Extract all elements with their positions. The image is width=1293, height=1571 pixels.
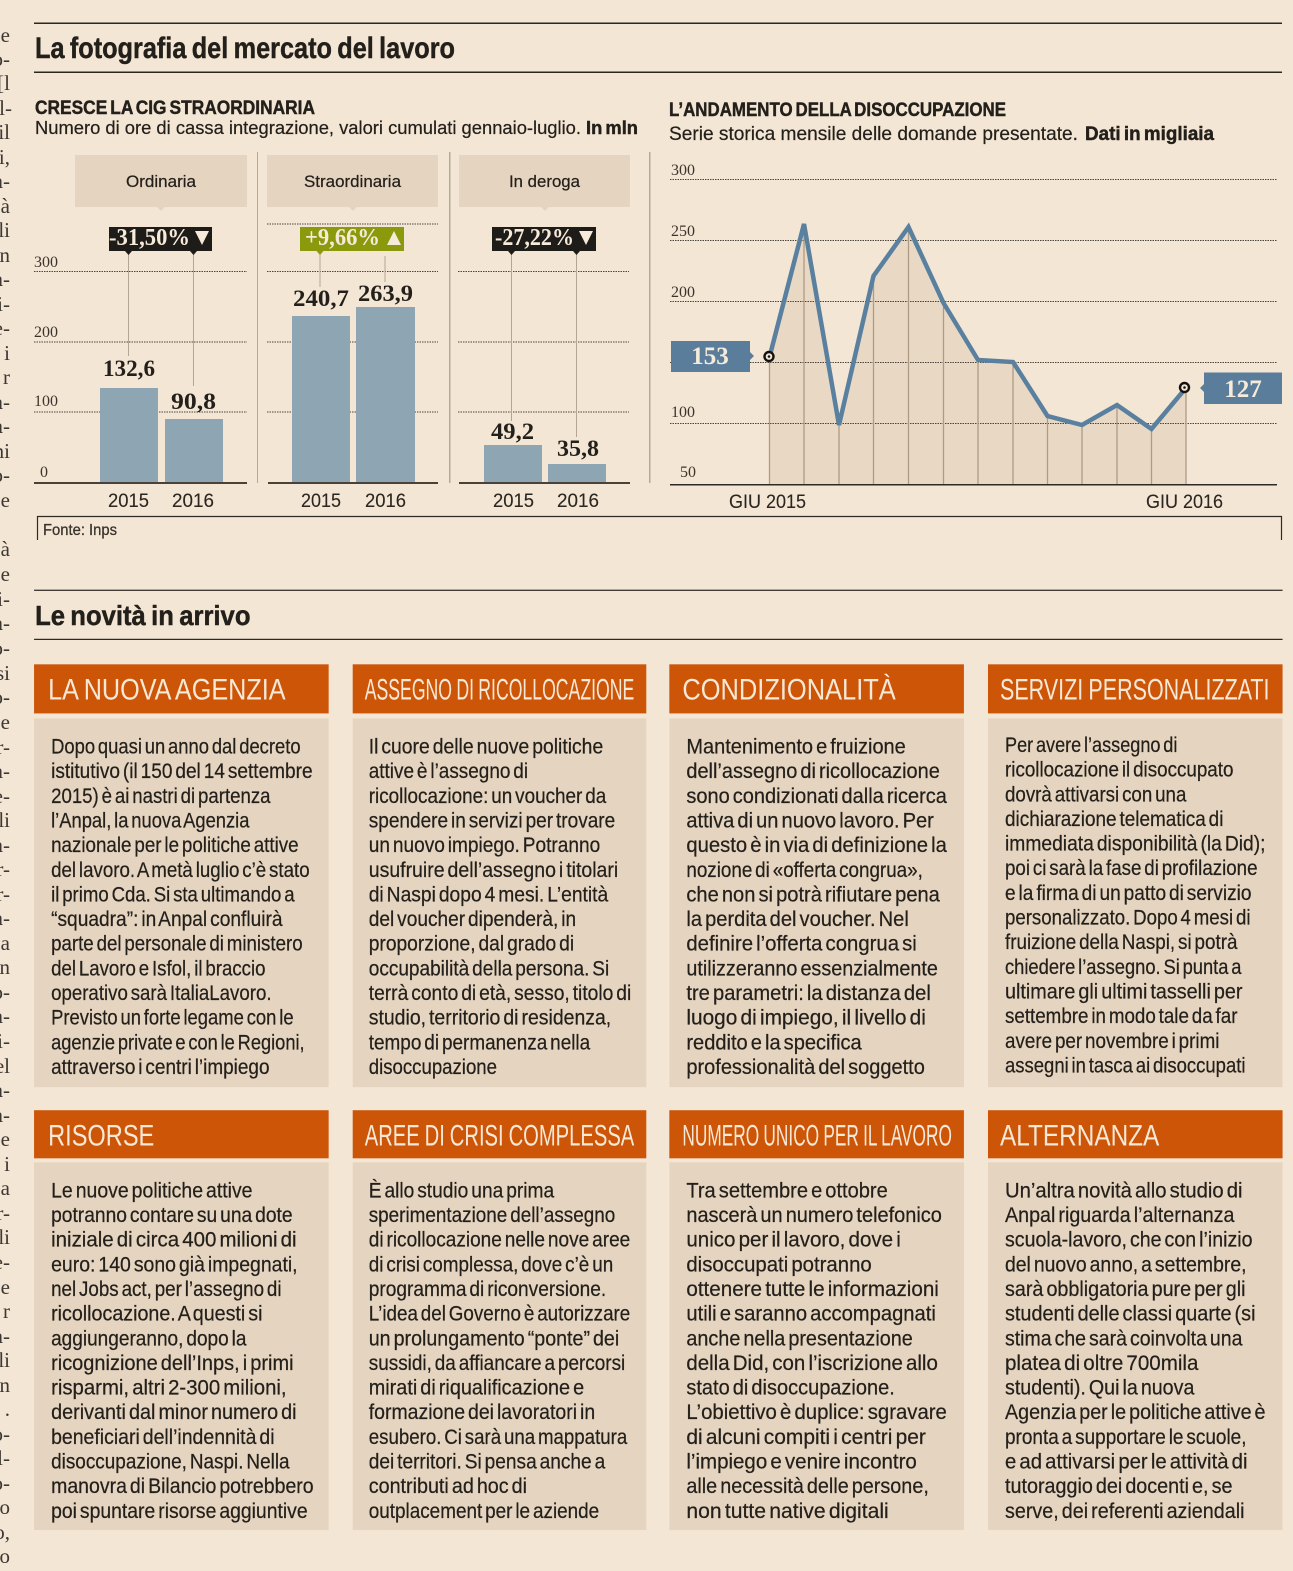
panel: Aree di crisi complessa: un prolungamento “ponte” dei [369,1327,619,1350]
panel: La nuova agenzia: il primo Cda. Si sta ultimando a [51,883,295,906]
y axis labels: 200 [34,324,58,341]
panel: La nuova agenzia: LA NUOVA AGENZIA [48,673,286,706]
adjacent article column text cut at left margin: . [5,1397,10,1421]
panel: Servizi personalizzati: personalizzato. Dopo 4 mesi di [1005,907,1250,930]
panel: Servizi personalizzati: dichiarazione telematica di [1005,808,1223,831]
panel: Numero unico per il lavoro: della Did, con l’iscrizione allo [686,1352,938,1375]
y axis labels: 100 [34,393,58,410]
panel: Assegno di ricollocazione: disoccupazione [369,1056,497,1079]
panel: Risorse [34,1110,329,1530]
panel: La nuova agenzia [34,664,329,1087]
adjacent article column text cut at left margin: e [1,710,10,734]
chart heading: Cresce la Cig straordinaria: CRESCE LA CIG STRAORDINARIA [35,98,315,119]
panel: Servizi personalizzati: e la firma di un patto di servizio [1005,882,1251,905]
panel: Servizi personalizzati: immediata disponibilità (la Did); [1005,833,1266,856]
panel: Straordinaria: 263,9 [358,281,413,306]
panel: Risorse: derivanti dal minor numero di [51,1401,297,1424]
callout: 127: 127 [1224,376,1262,403]
panel: Ordinaria: 90,8 [171,389,216,414]
panel: La nuova agenzia: parte del personale di ministero [51,933,303,956]
adjacent article column text cut at left margin: r [3,1299,10,1323]
panel: In deroga: 2016 [557,491,599,512]
panel: Servizi personalizzati: assegni in tasca ai disoccupati [1005,1054,1245,1077]
panel: Aree di crisi complessa: formazione dei lavoratori in [369,1401,595,1424]
panel: Numero unico per il lavoro: anche nella presentazione [686,1327,913,1350]
panel: Aree di crisi complessa: È allo studio una prima [369,1179,554,1202]
panel: Risorse: beneficiari dell’indennità di [51,1426,275,1449]
adjacent article column text cut at left margin: i [4,1152,10,1176]
callout: 127 [1180,372,1282,404]
panel: Numero unico per il lavoro: Tra settembre e ottobre [686,1179,888,1202]
panel: Numero unico per il lavoro: utili e saranno accompagnati [686,1303,936,1326]
panel: Assegno di ricollocazione: ricollocazione: un voucher da [369,785,606,808]
panel: Alternanza: studenti). Qui la nuova [1005,1377,1195,1400]
adjacent article column text cut at left margin: a [1,931,11,955]
panel: Condizionalità: questo è in via di definizione la [686,834,947,857]
panel: Assegno di ricollocazione: tempo di permanenza nella [369,1031,590,1054]
panel: Numero unico per il lavoro: di alcuni compiti i centri per [686,1426,926,1449]
panel: Assegno di ricollocazione: un nuovo impiego. Potranno [369,834,600,857]
panel: Assegno di ricollocazione: spendere in servizi per trovare [369,809,615,832]
panel: Numero unico per il lavoro: nascerà un numero telefonico [686,1204,942,1227]
panel: Alternanza: Agenzia per le politiche attive è [1005,1401,1266,1424]
panel: Alternanza: e ad attivarsi per le attività di [1005,1451,1247,1474]
axis labels [671,162,696,481]
axis labels: 100 [671,404,695,421]
panel: Risorse: manovra di Bilancio potrebbero [51,1475,314,1498]
panel: Condizionalità: CONDIZIONALITÀ [682,673,896,706]
panel: La nuova agenzia: Previsto un forte legame con le [51,1007,294,1030]
tag: +9,66%: +9,66% [305,225,380,251]
panel: Aree di crisi complessa: L’idea del Governo è autorizzare [369,1303,630,1326]
panel: Alternanza: Un’altra novità allo studio di [1005,1179,1242,1202]
panel: Assegno di ricollocazione: terrà conto di età, sesso, titolo di [369,982,631,1005]
panel: Alternanza: serve, dei referenti aziendali [1005,1500,1244,1523]
panel: Alternanza: Anpal riguarda l’alternanza [1005,1204,1235,1227]
panel: Alternanza: pronta a supportare le scuole, [1005,1426,1246,1449]
panel: In deroga: In deroga [509,173,581,191]
callout: 153: 153 [691,343,729,370]
panel: Assegno di ricollocazione: proporzione, dal grado di [369,933,574,956]
chart heading: L'andamento della disoccupazione: Serie storica mensile delle domande presentate. [669,123,1078,145]
panel: Risorse: poi spuntare risorse aggiuntive [51,1500,308,1523]
panel: Risorse: nel Jobs act, per l’assegno di [51,1278,282,1301]
panel: Servizi personalizzati: dovrà attivarsi con una [1005,783,1187,806]
panel: Condizionalità: nozione di «offerta congrua», [686,859,923,882]
chart heading: Cresce la Cig straordinaria [35,98,638,138]
panel: Risorse: euro: 140 sono già impegnati, [51,1253,298,1276]
data line [770,224,1185,429]
chart heading: Cresce la Cig straordinaria: Numero di ore di cassa integrazione, valori cumulati gennaio-luglio. [35,117,581,138]
panel: Risorse: aggiungeranno, dopo la [51,1327,247,1350]
panel: Assegno di ricollocazione: Il cuore delle nuove politiche [369,736,603,759]
bar chart: cassa integrazione [34,152,650,512]
y axis labels: 0 [40,464,48,481]
panel: In deroga [459,155,630,512]
panel: Alternanza: tutoraggio dei docenti e, se [1005,1475,1232,1498]
panel: La nuova agenzia: attraverso i centri l’impiego [51,1056,270,1079]
panel: Condizionalità [669,664,964,1087]
area under line [770,224,1186,485]
panel: Numero unico per il lavoro: ottenere tutte le informazioni [686,1278,939,1301]
panel: La nuova agenzia: l’Anpal, la nuova Agenzia [51,809,250,832]
month drop lines [770,224,1186,485]
x labels [729,492,1223,513]
y axis labels [34,254,58,481]
panel: Aree di crisi complessa: dei territori. Si pensa anche a [369,1451,605,1474]
panel: Servizi personalizzati [988,664,1283,1087]
adjacent article column text cut at left margin: e [1,488,10,512]
adjacent article column text cut at left margin: i [4,341,10,365]
panel: Alternanza: ALTERNANZA [1000,1119,1159,1152]
panel: Ordinaria: 132,6 [103,356,155,381]
section heading: Le novità in arrivo: Le novità in arrivo [35,600,250,631]
axis labels: 300 [671,162,695,179]
chart heading: Cresce la Cig straordinaria: In mln [586,117,638,138]
panel: Servizi personalizzati: Per avere l’assegno di [1005,734,1177,757]
panel: Aree di crisi complessa: sperimentazione dell’assegno [369,1204,615,1227]
panel: Risorse: risparmi, altri 2-300 milioni, [51,1377,287,1400]
source box: Fonte: Inps [43,522,117,539]
panel: Aree di crisi complessa: programma di riconversione. [369,1278,606,1301]
panel: Assegno di ricollocazione: occupabilità della persona. Si [369,957,609,980]
panel: Straordinaria: 240,7 [293,286,349,311]
section heading: La fotografia del mercato del lavoro: La fotografia del mercato del lavoro [35,32,455,65]
panel: La nuova agenzia: “squadra”: in Anpal confluirà [51,908,283,931]
callout: 153 [671,341,774,372]
panel: La nuova agenzia: Dopo quasi un anno dal decreto [51,736,301,759]
panel: Assegno di ricollocazione: attive è l’assegno di [369,760,528,783]
panel: Condizionalità: Mantenimento e fruizione [686,736,906,759]
panel: Risorse: ricollocazione. A questi si [51,1303,263,1326]
panel: Condizionalità: che non si potrà rifiutare pena [686,883,940,906]
axis labels: 250 [671,223,695,240]
panel: Aree di crisi complessa: sussidi, da affiancare a percorsi [369,1352,625,1375]
panel: Assegno di ricollocazione [353,664,646,1087]
x labels: GIU 2015 [729,492,806,513]
panel: Condizionalità: tre parametri: la distanza del [686,982,931,1005]
panel: Aree di crisi complessa: esubero. Ci sarà una mappatura [369,1426,628,1449]
panel: Alternanza: platea di oltre 700mila [1005,1352,1199,1375]
adjacent article column text cut at left margin: e [1,562,10,586]
panel: Condizionalità: definire l’offerta congrua si [686,933,917,956]
panel: Servizi personalizzati: fruizione della Naspi, si potrà [1005,931,1238,954]
line chart: disoccupazione [670,162,1282,513]
panel: Aree di crisi complessa: outplacement per le aziende [369,1500,599,1523]
panel: Aree di crisi complessa: mirati di riqualificazione e [369,1377,584,1400]
panel: La nuova agenzia: istitutivo (il 150 del 14 settembre [51,760,313,783]
panel: Servizi personalizzati: ultimare gli ultimi tasselli per [1005,980,1242,1003]
panel: Numero unico per il lavoro: non tutte native digitali [686,1500,889,1523]
axis labels: 50 [680,464,696,481]
panel: Numero unico per il lavoro [669,1110,964,1530]
panel: Assegno di ricollocazione: del voucher dipenderà, in [369,908,576,931]
panel: Aree di crisi complessa: di crisi complessa, dove c’è un [369,1253,613,1276]
panel: Alternanza: scuola-lavoro, che con l’inizio [1005,1229,1252,1252]
panel: Servizi personalizzati: ricollocazione il disoccupato [1005,759,1233,782]
panel: Aree di crisi complessa: AREE DI CRISI COMPLESSA [365,1119,634,1152]
panel: La nuova agenzia: 2015) è ai nastri di partenza [51,785,271,808]
panel: Straordinaria: 2015 [301,491,341,512]
panel: In deroga: 35,8 [557,436,599,461]
panel: Numero unico per il lavoro: disoccupati potranno [686,1253,872,1276]
panel: Straordinaria [267,155,438,512]
y axis labels: 300 [34,254,58,271]
panel: Risorse: ricognizione dell’Inps, i primi [51,1352,294,1375]
panel: La nuova agenzia: nazionale per le politiche attive [51,834,299,857]
panel: Condizionalità: la perdita del voucher. Nel [686,908,909,931]
panel: Assegno di ricollocazione: di Naspi dopo 4 mesi. L’entità [369,883,608,906]
panel: Aree di crisi complessa: contributi ad hoc di [369,1475,527,1498]
panel: Risorse: RISORSE [48,1119,154,1152]
panel: Numero unico per il lavoro: NUMERO UNICO PER IL LAVORO [682,1119,952,1152]
adjacent article column text cut at left margin: e [1,1275,10,1299]
panel: Ordinaria: 2016 [172,491,214,512]
panel: In deroga: 49,2 [491,419,534,444]
panel: Ordinaria: Ordinaria [126,173,197,191]
panel: Alternanza [988,1110,1283,1530]
panel: Numero unico per il lavoro: l’impiego e venire incontro [686,1451,917,1474]
panel: Condizionalità: dell’assegno di ricollocazione [686,760,940,783]
tag: -31,50%: -31,50% [109,225,190,251]
panel: Condizionalità: attiva di un nuovo lavoro. Per [686,809,934,832]
panel: Condizionalità: luogo di impiego, il livello di [686,1007,926,1030]
panel: Numero unico per il lavoro: unico per il lavoro, dove i [686,1229,901,1252]
adjacent article column text cut at left margin: à [1,194,11,218]
panel: Servizi personalizzati: poi ci sarà la fase di profilazione [1005,857,1258,880]
tag: +9,66% [300,225,404,255]
panel: Numero unico per il lavoro: alle necessità delle persone, [686,1475,929,1498]
adjacent article column text cut at left margin [0,23,12,1568]
panel: Numero unico per il lavoro: L’obiettivo è duplice: sgravare [686,1401,947,1424]
panel: Assegno di ricollocazione: usufruire dell’assegno i titolari [369,859,618,882]
panel: Aree di crisi complessa [353,1110,646,1530]
panel: La nuova agenzia: del lavoro. A metà luglio c’è stato [51,859,310,882]
panel: La nuova agenzia: agenzie private e con le Regioni, [51,1031,305,1054]
panel: Ordinaria [34,155,247,512]
panel: Risorse: Le nuove politiche attive [51,1179,253,1202]
panel: Condizionalità: sono condizionati dalla ricerca [686,785,947,808]
panel: Condizionalità: utilizzeranno essenzialmente [686,957,938,980]
panel: Condizionalità: professionalità del soggetto [686,1056,925,1079]
panel: Numero unico per il lavoro: stato di disoccupazione. [686,1377,895,1400]
panel: Risorse: disoccupazione, Naspi. Nella [51,1451,290,1474]
adjacent article column text cut at left margin: r [3,365,10,389]
adjacent article column text cut at left margin: e [1,1127,10,1151]
panel: Condizionalità: reddito e la specifica [686,1031,862,1054]
x labels: GIU 2016 [1146,492,1223,513]
chart heading: L'andamento della disoccupazione: Dati in migliaia [1085,123,1214,145]
panel: Straordinaria: 2016 [365,491,406,512]
panel: Straordinaria: Straordinaria [304,173,402,191]
panel: Ordinaria: 2015 [108,491,149,512]
panel: Risorse: potranno contare su una dote [51,1204,293,1227]
panel: Servizi personalizzati: settembre in modo tale da far [1005,1005,1237,1028]
panel: Servizi personalizzati: chiedere l’assegno. Si punta a [1005,956,1242,979]
panel: Servizi personalizzati: avere per novembre i primi [1005,1030,1219,1053]
adjacent article column text cut at left margin: a [1,1176,11,1200]
chart heading: L'andamento della disoccupazione: L’ANDAMENTO DELLA DISOCCUPAZIONE [669,100,1006,121]
panel: Aree di crisi complessa: di ricollocazione nelle nove aree [369,1229,630,1252]
panel: Alternanza: del nuovo anno, a settembre, [1005,1253,1246,1276]
tag: -27,22%: -27,22% [495,225,574,251]
source box [38,516,1282,540]
panel: Assegno di ricollocazione: ASSEGNO DI RICOLLOCAZIONE [365,673,634,706]
chart heading: L'andamento della disoccupazione [669,100,1214,145]
panel: Assegno di ricollocazione: studio, territorio di residenza, [369,1007,611,1030]
panel: Alternanza: sarà obbligatoria pure per gli [1005,1278,1245,1301]
adjacent article column text cut at left margin: e [1,23,10,47]
adjacent article column text cut at left margin: à [1,537,11,561]
panel: Alternanza: stima che sarà coinvolta una [1005,1327,1243,1350]
lower section: Le novità in arrivo [34,590,1283,1530]
grid lines and separators [34,152,650,483]
axis labels: 200 [671,284,695,301]
panel: La nuova agenzia: del Lavoro e Isfol, il braccio [51,957,266,980]
panel: Risorse: iniziale di circa 400 milioni di [51,1229,297,1252]
panel: In deroga: 2015 [493,491,534,512]
panel: La nuova agenzia: operativo sarà ItaliaLavoro. [51,982,272,1005]
panel: Alternanza: studenti delle classi quarte (si [1005,1303,1256,1326]
